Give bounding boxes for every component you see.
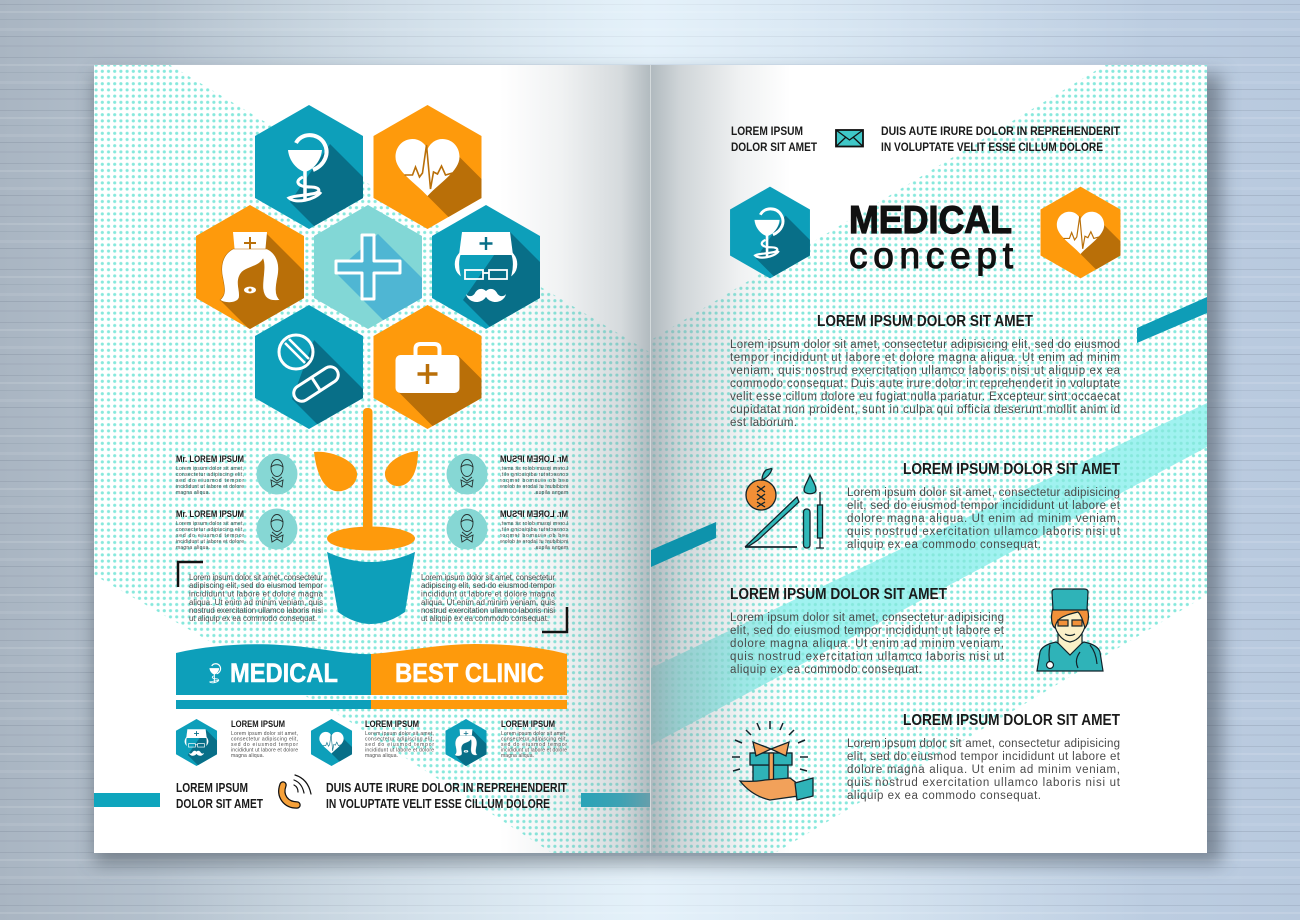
right leaf: [385, 451, 418, 486]
team member: lower left: Mr. LOREM IPSUM: [176, 509, 244, 519]
team member: lower right mirrored: incididunt ut labore et dolore: [500, 539, 568, 545]
hexagon: doctor: [432, 205, 540, 329]
stem: [363, 408, 372, 532]
text block with bracket: left: ut aliquip ex ea commodo consequat.: [189, 614, 317, 623]
feature: heart: magna aliqua.: [365, 753, 398, 759]
feature: nurse: incididunt ut labore et dolore: [501, 748, 567, 754]
team member: lower right mirrored: magna aliqua.: [534, 545, 568, 551]
section: surgeon: aliquip ex ea commodo consequat.: [730, 664, 922, 676]
soil: [327, 526, 415, 550]
hexagon: caduceus: [255, 105, 363, 229]
section: intro: cupidatat non proident, sunt in culpa qui officia deserunt mollit anim id: [730, 404, 1120, 416]
header contact: right page: [731, 124, 1121, 154]
team member: top left: [176, 454, 298, 496]
section: intro: LOREM IPSUM DOLOR SIT AMET: [817, 313, 1033, 330]
header contact: right page: LOREM IPSUM: [731, 124, 803, 138]
hexagon cluster: [196, 105, 540, 429]
icon: gift in hand: [732, 721, 813, 800]
title text: MEDICAL: [849, 199, 1012, 242]
team member: lower left: Lorem ipsum dolor sit amet,: [176, 521, 244, 527]
team member: top left: Mr. LOREM IPSUM: [176, 454, 244, 464]
text block with bracket: left: adipiscing elit, sed do eiusmod tempor: [189, 581, 323, 590]
section: gift: dolore magna aliqua. Ut enim ad minim veniam,: [847, 764, 1120, 776]
icon: apple and surgical tools: [745, 469, 824, 548]
hexagon: heart: [1040, 186, 1120, 278]
text block with bracket: left: nostrud exercitation ullamco laboris nisi: [189, 606, 323, 615]
feature: doctor: incididunt ut labore et dolore: [231, 748, 298, 754]
feature: doctor: consectetur adipiscing elit,: [231, 736, 298, 742]
section: gift: LOREM IPSUM DOLOR SIT AMET: [903, 712, 1120, 729]
header contact: right page: IN VOLUPTATE VELIT ESSE CILLUM DOLORE: [881, 140, 1103, 154]
text block with bracket: left: Lorem ipsum dolor sit amet, consectetur: [189, 573, 323, 582]
section: surgery tools: aliquip ex ea commodo consequat.: [847, 539, 1041, 551]
section: surgeon: [730, 586, 1103, 676]
team member: top left: consectetur adipiscing elit,: [176, 472, 244, 478]
section: gift: elit, sed do eiusmod tempor incididunt ut labore et: [847, 751, 1121, 763]
feature: heart: consectetur adipiscing elit,: [365, 736, 434, 742]
icon: envelope: [836, 130, 863, 146]
feature: heart: [310, 719, 434, 766]
section: intro: commodo consequat. Duis aute irure dolor in reprehenderit in voluptate: [730, 378, 1120, 390]
hexagon: cross: [314, 205, 422, 329]
header contact: right page: DOLOR SIT AMET: [731, 140, 818, 154]
feature: nurse: consectetur adipiscing elit,: [501, 736, 567, 742]
team member: lower right mirrored: consectetur adipiscing elit,: [500, 527, 568, 533]
feature: doctor: sed do eiusmod tempor: [231, 742, 298, 748]
team member: lower left: magna aliqua.: [176, 545, 210, 551]
feature: heart: incididunt ut labore et dolore: [365, 748, 434, 754]
text block with bracket: right: ut aliquip ex ea commodo consequat.: [421, 614, 549, 623]
team member: lower left: [176, 508, 298, 551]
section: intro: est laborum.: [730, 417, 797, 429]
section: intro: velit esse cillum dolore eu fugiat nulla pariatur. Excepteur sint occaecat: [730, 391, 1121, 403]
pot: [327, 552, 415, 624]
text block with bracket: left: incididunt ut labore et dolore magna: [189, 590, 324, 598]
flower pot plant: [314, 408, 418, 624]
section: surgeon: quis nostrud exercitation ullamco laboris nisi ut: [730, 651, 1005, 663]
feature: nurse: magna aliqua.: [501, 753, 534, 759]
left leaf: [314, 452, 357, 491]
banner: medical best clinic: BEST CLINIC: [395, 658, 544, 688]
hexagon: nurse: [196, 205, 304, 329]
team member: lower right mirrored: Mr. LOREM IPSUM: [500, 509, 568, 519]
feature: doctor: [176, 719, 298, 766]
team member: top right mirrored: magna aliqua.: [534, 490, 568, 496]
header contact: right page: DUIS AUTE IRURE DOLOR IN REPREHENDERIT: [881, 124, 1121, 138]
section: surgeon: dolore magna aliqua. Ut enim ad minim veniam,: [730, 638, 1004, 650]
text block with bracket: right: adipiscing elit, sed do eiusmod tempor: [421, 581, 555, 590]
section: gift: Lorem ipsum dolor sit amet, consectetur adipisicing: [847, 738, 1120, 750]
team member: lower right mirrored: sed do eiusmod tempor: [500, 533, 568, 539]
title row: [730, 186, 1120, 278]
feature: nurse: sed do eiusmod tempor: [501, 742, 567, 748]
team member: top left: Lorem ipsum dolor sit amet,: [176, 466, 244, 472]
feature: heart: sed do eiusmod tempor: [365, 742, 434, 748]
title text: concept: [849, 235, 1014, 276]
team member: lower right mirrored: [446, 508, 568, 551]
text block with bracket: left: aliqua. Ut enim ad minim veniam, quis: [189, 598, 323, 607]
section: surgery tools: Lorem ipsum dolor sit amet, consectetur adipisicing: [847, 487, 1120, 499]
text block with bracket: right: nostrud exercitation ullamco laboris nisi: [421, 606, 555, 615]
team member: top left: sed do eiusmod tempor: [176, 478, 244, 484]
section: intro: veniam, quis nostrud exercitation ullamco laboris nisi ut aliquip ex ea: [730, 365, 1121, 377]
hexagon: caduceus: [730, 186, 810, 278]
hexagon: heart: [374, 105, 482, 229]
brochure pages: [94, 65, 1207, 853]
feature: nurse: Lorem ipsum dolor sit amet,: [501, 731, 567, 737]
footer contact: left page: LOREM IPSUM: [176, 780, 248, 795]
team member: top left: magna aliqua.: [176, 490, 210, 496]
section: intro: tempor incididunt ut labore et dolore magna aliqua. Ut enim ad minim: [730, 352, 1120, 364]
feature: nurse: LOREM IPSUM: [501, 719, 555, 730]
section: gift: [732, 712, 1121, 802]
icon: phone: [282, 775, 311, 805]
section: surgery tools: LOREM IPSUM DOLOR SIT AMET: [903, 461, 1120, 478]
feature: nurse: [445, 719, 567, 766]
text block with bracket: right: incididunt ut labore et dolore magna: [421, 590, 556, 598]
hexagon: pills: [255, 305, 363, 429]
team member: lower left: sed do eiusmod tempor: [176, 533, 244, 539]
text block with bracket: right: Lorem ipsum dolor sit amet, consectetur: [421, 573, 555, 582]
footer contact: left page: [176, 775, 567, 811]
section: gift: aliquip ex ea commodo consequat.: [847, 790, 1041, 802]
section: gift: quis nostrud exercitation ullamco laboris nisi ut: [847, 777, 1121, 789]
banner: medical best clinic: [176, 644, 567, 709]
feature: heart: LOREM IPSUM: [365, 719, 419, 730]
team member: lower left: incididunt ut labore et dolore: [176, 539, 244, 545]
team member: top right mirrored: Lorem ipsum dolor sit amet,: [500, 466, 568, 472]
banner: medical best clinic: MEDICAL: [230, 658, 338, 688]
title text: [849, 199, 1014, 276]
team member: lower left: consectetur adipiscing elit,: [176, 527, 244, 533]
footer contact: left page: DUIS AUTE IRURE DOLOR IN REPREHENDERIT: [326, 780, 567, 795]
icon: small caduceus: [209, 664, 221, 683]
section: surgery tools: dolore magna aliqua. Ut enim ad minim veniam,: [847, 513, 1120, 525]
hexagon: medical case: [374, 305, 482, 429]
feature: doctor: LOREM IPSUM: [231, 719, 285, 730]
feature: doctor: Lorem ipsum dolor sit amet,: [231, 731, 298, 737]
footer contact: left page: IN VOLUPTATE VELIT ESSE CILLUM DOLORE: [326, 796, 550, 811]
section: surgery tools: elit, sed do eiusmod tempor incididunt ut labore et: [847, 500, 1121, 512]
feature: heart: Lorem ipsum dolor sit amet,: [365, 731, 434, 737]
section: intro: [730, 313, 1121, 429]
team member: top left: incididunt ut labore et dolore: [176, 484, 244, 490]
feature: doctor: magna aliqua.: [231, 753, 264, 759]
text block with bracket: right: aliqua. Ut enim ad minim veniam, quis: [421, 598, 555, 607]
team member: top right mirrored: consectetur adipiscing elit,: [500, 472, 568, 478]
section: surgeon: LOREM IPSUM DOLOR SIT AMET: [730, 586, 947, 603]
text block with bracket: right: [421, 573, 567, 632]
section: intro: Lorem ipsum dolor sit amet, consectetur adipisicing elit, sed do eiusmod: [730, 339, 1120, 351]
text block with bracket: left: [178, 562, 324, 623]
section: surgery tools: [745, 461, 1121, 551]
team member: top right mirrored: sed do eiusmod tempor: [500, 478, 568, 484]
icon: surgeon: [1037, 589, 1103, 671]
section: surgery tools: quis nostrud exercitation ullamco laboris nisi ut: [847, 526, 1121, 538]
section: surgeon: elit, sed do eiusmod tempor incididunt ut labore et: [730, 625, 1005, 637]
footer contact: left page: DOLOR SIT AMET: [176, 796, 263, 811]
team member: top right mirrored: incididunt ut labore et dolore: [500, 484, 568, 490]
team member: top right mirrored: Mr. LOREM IPSUM: [500, 454, 568, 464]
team member: top right mirrored: [446, 454, 568, 496]
section: surgeon: Lorem ipsum dolor sit amet, consectetur adipisicing: [730, 612, 1004, 624]
team member: lower right mirrored: Lorem ipsum dolor sit amet,: [500, 521, 568, 527]
